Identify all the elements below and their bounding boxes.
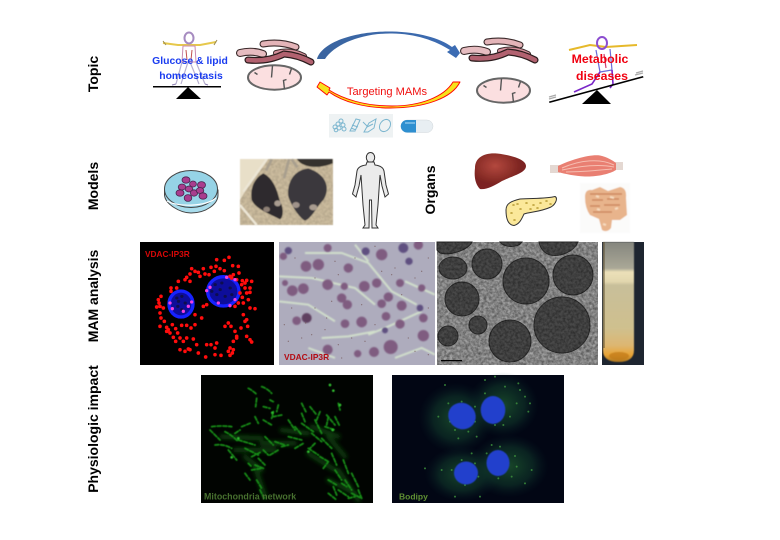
icon: drug capsule [401, 120, 433, 132]
text: Targeting MAMs: Targeting MAMs [347, 86, 428, 98]
fine dark granules [284, 246, 428, 358]
arrow: targeting MAMs yellow and red return arrow [317, 82, 460, 108]
label: Mitochondria network [204, 492, 296, 502]
micrograph: Bodipy lipid staining [392, 372, 564, 503]
green mitochondrial strands, bright layer [210, 387, 362, 500]
nuclei [280, 240, 429, 357]
icon: petri dish with cells [164, 170, 218, 213]
red proximity ligation dots [157, 257, 255, 357]
icon: pancreas [506, 196, 556, 226]
label: VDAC-IP3R [145, 249, 190, 259]
magenta overlap dots [170, 277, 235, 311]
photo: gradient centrifuge tube [602, 242, 644, 365]
seesaw beam and fulcrum [549, 76, 644, 104]
blue nuclei [443, 396, 510, 484]
arrow: blue curved arrow to the right [317, 31, 460, 59]
green cytoplasm haze [418, 372, 549, 502]
micrograph: VDAC-IP3R fluorescence [140, 242, 274, 365]
row label: Physiologic impact: Physiologic impact [85, 365, 101, 493]
nuclei [169, 277, 239, 317]
icon: human figure, tilted [549, 37, 643, 99]
row label: MAM analysis: MAM analysis [85, 249, 101, 342]
micrograph: electron microscopy of mitochondria [437, 242, 598, 365]
label: Organs: Organs [422, 165, 438, 215]
balance: glucose and lipid homeostasis [152, 32, 228, 99]
text: Metabolic diseases: Metabolic [572, 52, 629, 66]
seesaw beam and fulcrum [153, 86, 221, 99]
icon: liver [475, 153, 526, 189]
icon: ER and mitochondrion, left [240, 43, 311, 90]
isolated bright spots [232, 385, 340, 457]
text: Glucose and lipid homeostasis: homeostasis [159, 71, 223, 82]
icon: human figure, balanced [163, 32, 217, 85]
micrograph: mitochondria network [201, 375, 373, 503]
cytoplasm texture [437, 242, 598, 365]
green mitochondrial strands, dim layer [222, 427, 358, 500]
icon: muscle [550, 155, 623, 177]
text: Glucose and lipid homeostasis [152, 56, 228, 82]
label: Bodipy [399, 492, 428, 502]
micrograph: stained liver tissue [279, 240, 435, 365]
mitochondria profiles [437, 242, 593, 362]
icon: ER and mitochondrion, right [464, 41, 535, 103]
pale cell borders [279, 245, 435, 358]
icon: intestine [580, 183, 630, 233]
photo: two mice [240, 159, 333, 225]
icon: human body silhouette [352, 152, 388, 228]
text: Metabolic diseases: diseases [576, 69, 628, 83]
icon: therapeutic microbes and natural compounds [329, 114, 393, 138]
row label: Models: Models [85, 162, 101, 210]
membrane texture [437, 242, 598, 365]
balance: metabolic diseases [549, 37, 644, 104]
text: Metabolic diseases [572, 52, 629, 83]
text: Glucose and lipid homeostasis: Glucose & lipid [152, 56, 228, 67]
scale bar [441, 360, 462, 361]
green lipid droplets [425, 377, 532, 497]
label: VDAC-IP3R [284, 352, 329, 362]
row label: Topic: Topic [85, 56, 101, 92]
